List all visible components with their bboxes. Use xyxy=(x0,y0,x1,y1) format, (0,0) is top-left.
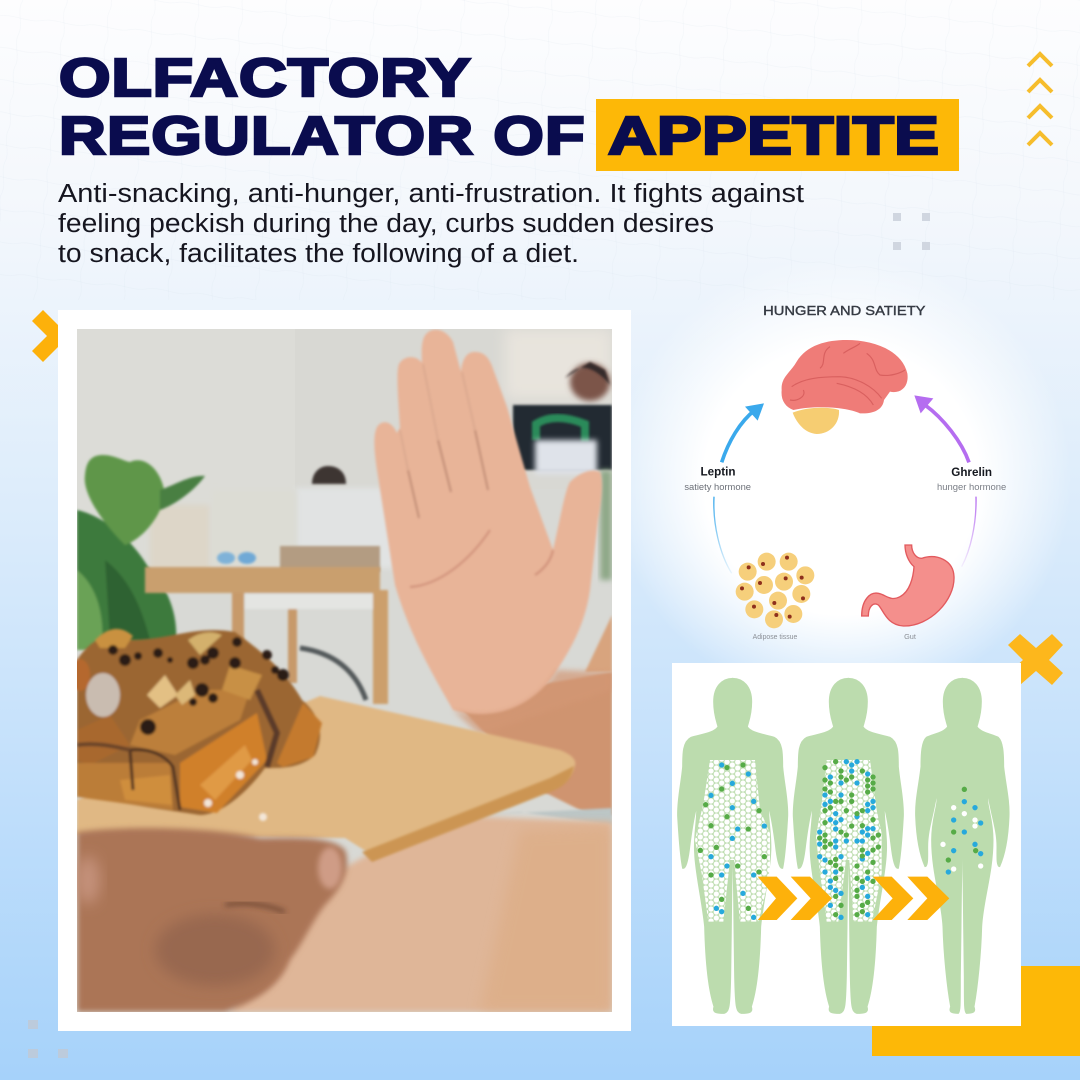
title xyxy=(59,47,585,166)
green blur behind thumb xyxy=(600,470,612,580)
label: leptin xyxy=(684,466,751,492)
figure: second body xyxy=(793,678,903,1013)
icon: left chevron xyxy=(32,310,58,362)
lower hand holding tray xyxy=(77,828,347,1012)
title: REGULATOR OF xyxy=(59,105,585,166)
decorative dots bottom xyxy=(28,1020,68,1058)
figure: first body xyxy=(678,678,788,1013)
decorative dots top xyxy=(893,213,930,250)
photo: hand refusing food xyxy=(70,329,612,1012)
icon: upward chevrons xyxy=(1028,54,1052,145)
wooden table xyxy=(230,815,612,1012)
orange corner block xyxy=(872,966,1080,1056)
hunger and satiety diagram xyxy=(612,255,1072,705)
label: ghrelin xyxy=(937,466,1006,492)
icon: stomach xyxy=(862,545,954,626)
blue-grey gap under forearm xyxy=(530,806,612,824)
arrow: leptin xyxy=(714,403,764,573)
label: ghrelin: hunger hormone xyxy=(937,482,1006,492)
panel: body fat transformation xyxy=(672,663,1021,1026)
label: adipose tissue: Adipose tissue xyxy=(753,632,797,641)
food: chocolate toast xyxy=(70,629,322,821)
label: leptin: satiety hormone xyxy=(684,482,751,492)
label: ghrelin: Ghrelin xyxy=(951,466,992,479)
table xyxy=(145,567,388,704)
label: gut: Gut xyxy=(904,632,916,641)
diagram title: HUNGER AND SATIETY xyxy=(763,303,926,318)
intro text: to snack, facilitates the following of a diet. xyxy=(58,240,579,268)
intro text: Anti-snacking, anti-hunger, anti-frustration. It fights against xyxy=(58,180,804,208)
panel: photo frame xyxy=(58,310,631,1031)
title highlight: appetite: APPETITE xyxy=(608,105,939,166)
plant xyxy=(77,455,205,650)
icon: x mark xyxy=(1008,634,1063,685)
intro text: feeling peckish during the day, curbs sudden desires xyxy=(58,210,714,238)
intro text xyxy=(58,180,804,268)
wooden tray xyxy=(77,696,575,855)
hand xyxy=(374,330,602,714)
arrow: ghrelin xyxy=(914,395,976,567)
arrows: orange chevrons xyxy=(758,877,949,920)
icon: brain xyxy=(782,340,908,434)
label: leptin: Leptin xyxy=(701,466,735,479)
title: OLFACTORY xyxy=(59,47,471,108)
figure: third body xyxy=(916,678,1009,1013)
forearm xyxy=(453,672,612,815)
icon: adipose cells xyxy=(736,553,814,628)
